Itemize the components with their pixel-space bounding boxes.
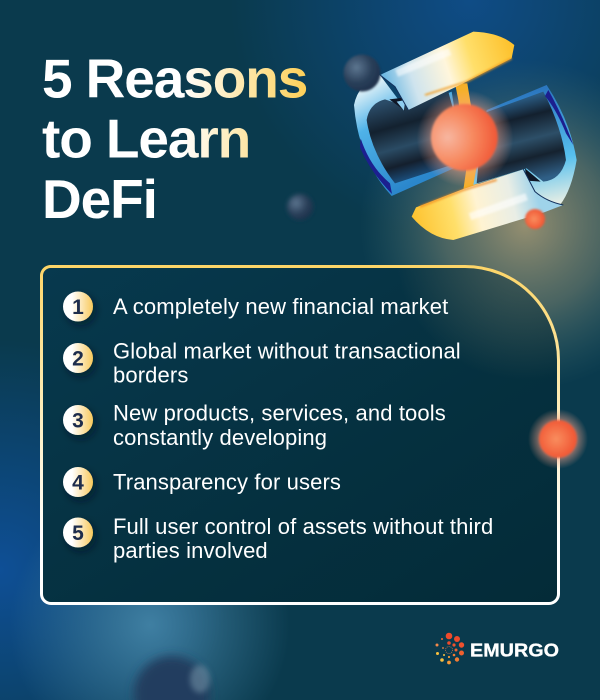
item 2: borders (113, 362, 188, 388)
sphere: small dark (287, 194, 313, 220)
sphere: small orange near illustration (525, 209, 545, 229)
item 3 (63, 400, 446, 450)
title: to Learn (42, 108, 250, 170)
yellow connector (455, 83, 478, 190)
item 5: Full user control of assets without third (113, 514, 493, 539)
glowing core (417, 90, 513, 187)
lower shell (412, 169, 563, 240)
badge 1 (63, 292, 93, 322)
badge 1: 1 (72, 296, 84, 319)
sphere: bottom dark (134, 656, 210, 700)
item 2 (63, 338, 461, 388)
item 1: A completely new financial market (113, 294, 448, 319)
logo: EMURGO (436, 633, 559, 664)
badge 2: 2 (72, 348, 84, 370)
left cylinder body (354, 75, 467, 196)
upper shell (380, 32, 514, 110)
item 3: New products, services, and tools (113, 400, 446, 426)
badge 3: 3 (72, 410, 84, 432)
sphere: dark top (344, 54, 380, 92)
title: DeFi (42, 168, 157, 230)
item 4 (63, 467, 341, 497)
sphere: glowing orange on panel edge (528, 409, 588, 469)
item 5 (63, 514, 493, 563)
item 5: parties involved (113, 538, 268, 563)
item 4: Transparency for users (113, 470, 341, 494)
right cylinder body (473, 85, 577, 205)
panel (42, 266, 558, 604)
badge 4: 4 (72, 472, 84, 494)
list (63, 292, 493, 563)
title: 5 Reasons (42, 48, 307, 110)
badge 5 (63, 518, 93, 548)
logo mark (436, 633, 464, 664)
badge 4 (63, 467, 93, 497)
badge 5: 5 (72, 522, 84, 545)
badge 3 (63, 405, 93, 435)
item 2: Global market without transactional (113, 338, 461, 364)
logo wordmark: EMURGO (470, 640, 559, 660)
item 3: constantly developing (113, 425, 327, 450)
illustration: split cylinder with glowing core (354, 32, 577, 240)
badge 2 (63, 343, 93, 373)
